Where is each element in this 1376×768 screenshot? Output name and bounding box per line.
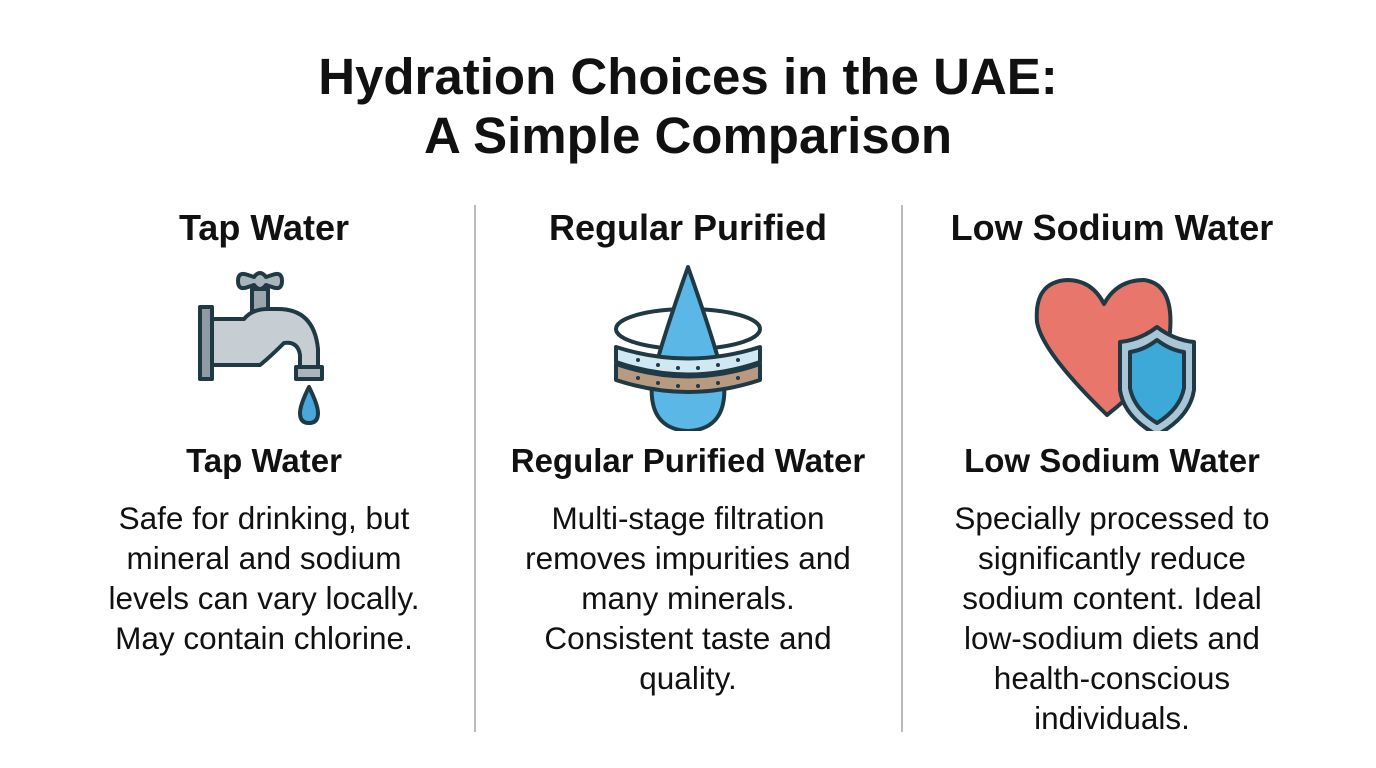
icon: filtered drop <box>614 265 762 431</box>
text: Multi-stage filtration <box>551 500 825 536</box>
panel: low sodium <box>951 207 1273 736</box>
text <box>954 500 1270 736</box>
text: Specially processed to <box>954 500 1270 536</box>
text: Consistent taste and <box>544 620 832 656</box>
icon: tap <box>198 271 324 425</box>
text: Safe for drinking, but <box>119 500 409 536</box>
heading: regular purified: Regular Purified <box>549 207 827 248</box>
text: mineral and sodium <box>127 540 401 576</box>
icon: heart with shield <box>1034 278 1196 431</box>
text: sodium content. Ideal <box>962 580 1262 616</box>
heading: tap water: Tap Water <box>179 207 349 248</box>
subheading: Low Sodium Water <box>964 442 1260 479</box>
title: A Simple Comparison <box>424 107 952 164</box>
text <box>108 500 420 656</box>
text: May contain chlorine. <box>115 620 413 656</box>
panel: regular purified <box>511 207 865 696</box>
subheading: Tap Water <box>186 442 342 479</box>
panel: tap water <box>108 207 420 656</box>
text <box>525 500 851 696</box>
heading: low sodium: Low Sodium Water <box>951 207 1273 248</box>
title <box>318 48 1058 164</box>
text: low-sodium diets and <box>964 620 1260 656</box>
subheading: Regular Purified Water <box>511 442 865 479</box>
text: removes impurities and <box>525 540 851 576</box>
title: Hydration Choices in the UAE: <box>318 48 1058 105</box>
text: levels can vary locally. <box>108 580 420 616</box>
text: significantly reduce <box>978 540 1246 576</box>
text: health-conscious <box>994 660 1230 696</box>
text: quality. <box>639 660 737 696</box>
text: many minerals. <box>581 580 795 616</box>
text: individuals. <box>1034 700 1190 736</box>
